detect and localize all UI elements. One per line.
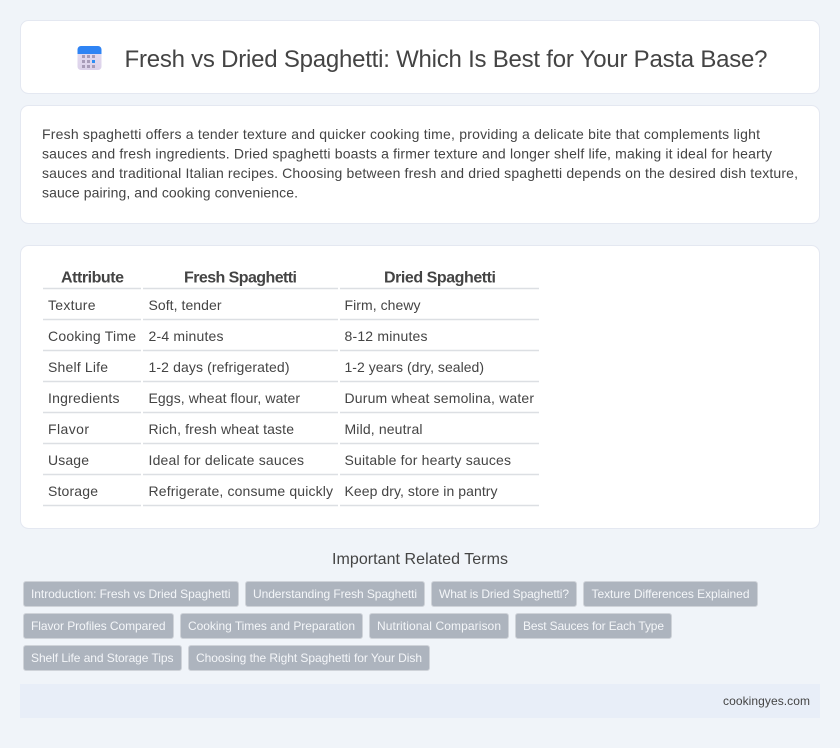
row: storage: Refrigerate, consume quickly	[148, 483, 333, 499]
tag	[246, 582, 424, 606]
tag: Understanding Fresh Spaghetti	[253, 587, 417, 601]
row: shelf life	[48, 359, 484, 375]
row: flavor: Rich, fresh wheat taste	[148, 421, 294, 437]
row: shelf life: 1-2 days (refrigerated)	[148, 359, 290, 375]
tag	[180, 614, 362, 638]
text block: introduction: sauces and traditional Italian recipes. Choosing between fresh and dried spaghetti depends on the desired dish texture,	[42, 165, 798, 181]
row: storage	[48, 483, 498, 499]
table header	[61, 270, 496, 286]
row: ingredients: Eggs, wheat flour, water	[148, 390, 300, 406]
tag: Cooking Times and Preparation	[188, 619, 355, 633]
row: ingredients	[48, 390, 534, 406]
row: cooking time: 8-12 minutes	[344, 328, 428, 344]
panel: introduction	[20, 106, 820, 224]
row: texture: Soft, tender	[148, 297, 222, 313]
tag	[24, 646, 182, 670]
table header: Attribute	[61, 270, 124, 286]
row: usage: Ideal for delicate sauces	[148, 452, 304, 468]
tag: Choosing the Right Spaghetti for Your Dish	[196, 651, 422, 665]
heading: related terms: Important Related Terms	[332, 551, 508, 568]
text block: introduction: Fresh spaghetti offers a tender texture and quicker cooking time, providing a delicate bite that complements light	[42, 126, 760, 142]
panel: comparison table	[20, 246, 820, 528]
row: shelf life: 1-2 years (dry, sealed)	[344, 359, 484, 375]
table header: Dried Spaghetti	[384, 270, 496, 286]
row: texture: Texture	[48, 297, 96, 313]
tag	[584, 582, 758, 606]
row: cooking time	[48, 328, 428, 344]
panel: header	[20, 20, 820, 94]
row: ingredients: Durum wheat semolina, water	[344, 390, 534, 406]
tag: Best Sauces for Each Type	[523, 619, 664, 633]
row: texture: Firm, chewy	[344, 297, 420, 313]
tag: Nutritional Comparison	[377, 619, 501, 633]
row: flavor: Mild, neutral	[344, 421, 422, 437]
tag	[188, 646, 430, 670]
row: storage: Keep dry, store in pantry	[344, 483, 498, 499]
tag	[516, 614, 672, 638]
footer	[20, 684, 820, 718]
tag	[432, 582, 576, 606]
tag: Flavor Profiles Compared	[31, 619, 166, 633]
tag: Introduction: Fresh vs Dried Spaghetti	[31, 587, 230, 601]
row: flavor	[48, 421, 422, 437]
text block: introduction: sauces and fresh ingredients. Dried spaghetti boasts a firmer texture and longer shelf life, making it ideal for hearty	[42, 146, 772, 162]
row: usage: Usage	[48, 452, 89, 468]
icon: calendar	[78, 46, 102, 70]
tag	[24, 582, 238, 606]
row: flavor: Flavor	[48, 421, 89, 437]
row: texture	[48, 297, 420, 313]
title: Fresh vs Dried Spaghetti: Which Is Best for Your Pasta Base?	[124, 46, 768, 73]
tag: Texture Differences Explained	[592, 587, 750, 601]
row: storage: Storage	[48, 483, 98, 499]
related term tags	[24, 582, 758, 670]
text block: introduction: sauce pairing, and cooking convenience.	[42, 184, 298, 200]
row: ingredients: Ingredients	[48, 390, 120, 406]
row: cooking time: 2-4 minutes	[148, 328, 224, 344]
table header: Fresh Spaghetti	[184, 270, 297, 286]
row: shelf life: Shelf Life	[48, 359, 108, 375]
tag: What is Dried Spaghetti?	[439, 587, 569, 601]
tag	[24, 614, 174, 638]
text block: introduction	[42, 126, 798, 200]
tag: Shelf Life and Storage Tips	[31, 651, 174, 665]
row: cooking time: Cooking Time	[48, 328, 136, 344]
tag	[370, 614, 508, 638]
row: usage: Suitable for hearty sauces	[344, 452, 511, 468]
row: usage	[48, 452, 511, 468]
footer source: cookingyes.com	[723, 694, 810, 708]
